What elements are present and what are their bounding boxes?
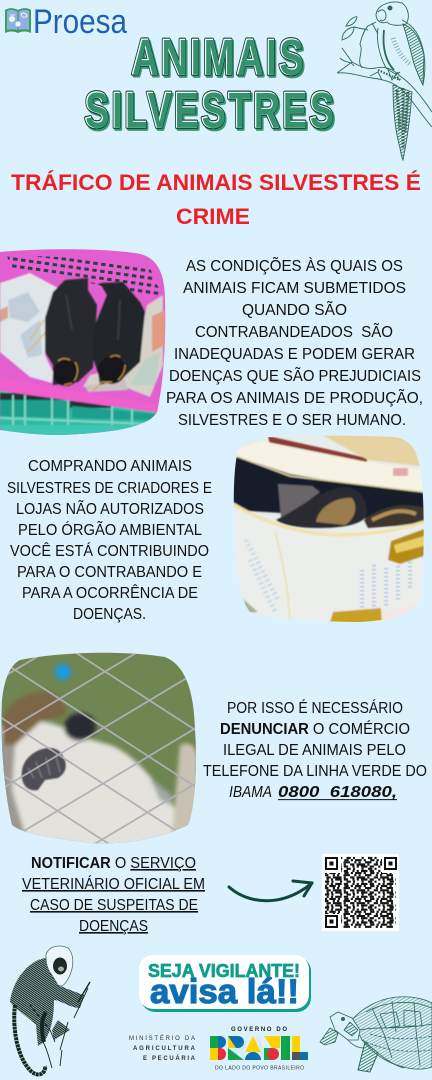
- text block: buying animals: PELO ÓRGÃO AMBIENTAL: [18, 519, 202, 539]
- text block: report: POR ISSO É NECESSÁRIO: [227, 698, 403, 717]
- text block: buying animals: VOCÊ ESTÁ CONTRIBUINDO: [10, 541, 209, 560]
- monkey head: [46, 946, 73, 986]
- paper lining left: [0, 273, 58, 383]
- QR finder patterns: [324, 856, 399, 930]
- logo: Governo do Brasil: DO LADO DO POVO BRASILEIRO: [215, 1066, 304, 1072]
- text block: buying animals: SILVESTRES DE CRIADORES E: [7, 480, 212, 497]
- snake: [276, 487, 367, 528]
- heading: crime: CRIME: [176, 204, 250, 229]
- title line: ANIMAIS: ANIMAIS: [132, 29, 306, 85]
- badge: Seja vigilante: [139, 955, 311, 1012]
- text block: buying animals: PARA O CONTRABANDO E: [17, 564, 202, 581]
- text block: buying animals: DOENÇAS.: [73, 606, 146, 623]
- title line: SILVESTRES: SILVESTRES: [84, 82, 336, 138]
- title line: SILVESTRES: SILVESTRES: [85, 83, 337, 139]
- text block: notify: CASO DE SUSPEITAS DE: [30, 897, 198, 914]
- title line: ANIMAIS: ANIMAIS: [132, 30, 307, 86]
- text block: report: ILEGAL DE ANIMAIS PELO: [223, 742, 406, 759]
- text block: buying animals: COMPRANDO ANIMAIS: [28, 458, 192, 475]
- blue handwriting: [246, 540, 278, 612]
- title line: SILVESTRES: SILVESTRES: [84, 82, 336, 138]
- gold clasp: [388, 529, 424, 564]
- logo: Governo do Brasil: [210, 1027, 308, 1072]
- text block: report: 0800 618080,: [278, 784, 397, 801]
- text block: buying animals: PARA A OCORRÊNCIA DE: [22, 583, 198, 602]
- text block: conditions: INADEQUADAS E PODEM GERAR: [174, 346, 415, 363]
- badge: Seja vigilante: SEJA VIGILANTE!: [148, 961, 300, 981]
- text block: conditions: AS CONDIÇÕES ÀS QUAIS OS: [186, 255, 403, 275]
- logo: ministry: MINISTÉRIO DA: [129, 1035, 195, 1042]
- teal crate base: [0, 390, 157, 426]
- logo: ministry: E PECUÁRIA: [143, 1055, 196, 1062]
- icon: book logo: [5, 8, 31, 33]
- title: [84, 29, 338, 140]
- logo: ministry: [129, 1035, 196, 1062]
- lower case front: [233, 503, 424, 624]
- text block: notify: VETERINÁRIO OFICIAL EM: [22, 874, 205, 893]
- text block: report: [203, 698, 427, 801]
- title line: ANIMAIS: ANIMAIS: [133, 31, 308, 87]
- lid top: [268, 436, 367, 462]
- cloth right: [83, 295, 163, 397]
- heading: crime: [11, 170, 421, 229]
- text block: notify: [22, 855, 205, 935]
- Brasil coloured wordmark: BRASIL: [210, 1030, 308, 1067]
- logo: ministry: AGRICULTURA: [133, 1046, 196, 1052]
- text block: conditions: SILVESTRES E O SER HUMANO.: [178, 412, 406, 429]
- title line: SILVESTRES: SILVESTRES: [86, 84, 338, 140]
- photo: monkey behind fence: [0, 648, 200, 850]
- heading: crime: TRÁFICO DE ANIMAIS SILVESTRES É: [11, 170, 421, 195]
- logo: Proesa: [5, 3, 127, 41]
- photo: birds in pink crate: [0, 248, 170, 440]
- illustration: monkey: [10, 946, 90, 1074]
- logo: Governo do Brasil: GOVERNO DO: [231, 1027, 287, 1033]
- text block: conditions: CONTRABANDEADOS SÃO: [195, 321, 393, 341]
- bird 2: [93, 282, 145, 385]
- arrow to QR code: [229, 881, 312, 901]
- text block: buying animals: LOJAS NÃO AUTORIZADOS: [16, 498, 204, 518]
- logo wordmark: Proesa: [33, 3, 127, 41]
- text block: conditions: QUANDO SÃO: [242, 299, 347, 319]
- photo: snake in suitcase: [230, 434, 426, 624]
- QR code: [322, 854, 399, 931]
- text block: conditions: [166, 255, 423, 429]
- bird 1: [45, 278, 97, 385]
- title line: ANIMAIS: ANIMAIS: [132, 29, 306, 85]
- text block: report: IBAMA: [229, 784, 272, 801]
- text block: report: DENUNCIAR O COMÉRCIO: [220, 719, 410, 738]
- text block: conditions: ANIMAIS FICAM SUBMETIDOS: [183, 280, 406, 297]
- badge: Seja vigilante: avisa lá!!: [150, 973, 299, 1011]
- text block: buying animals: [7, 458, 212, 623]
- illustration: turtle: [320, 997, 432, 1072]
- chain-link fence: [0, 648, 200, 848]
- illustration: parrot: [337, 2, 432, 160]
- text block: notify: NOTIFICAR O SERVIÇO: [31, 855, 196, 872]
- text block: conditions: PARA OS ANIMAIS DE PRODUÇÃO,: [166, 387, 423, 407]
- crate rim: [0, 378, 160, 413]
- text block: notify: DOENÇAS: [79, 918, 148, 935]
- crate holes: [7, 255, 162, 296]
- dark interior: [233, 456, 424, 522]
